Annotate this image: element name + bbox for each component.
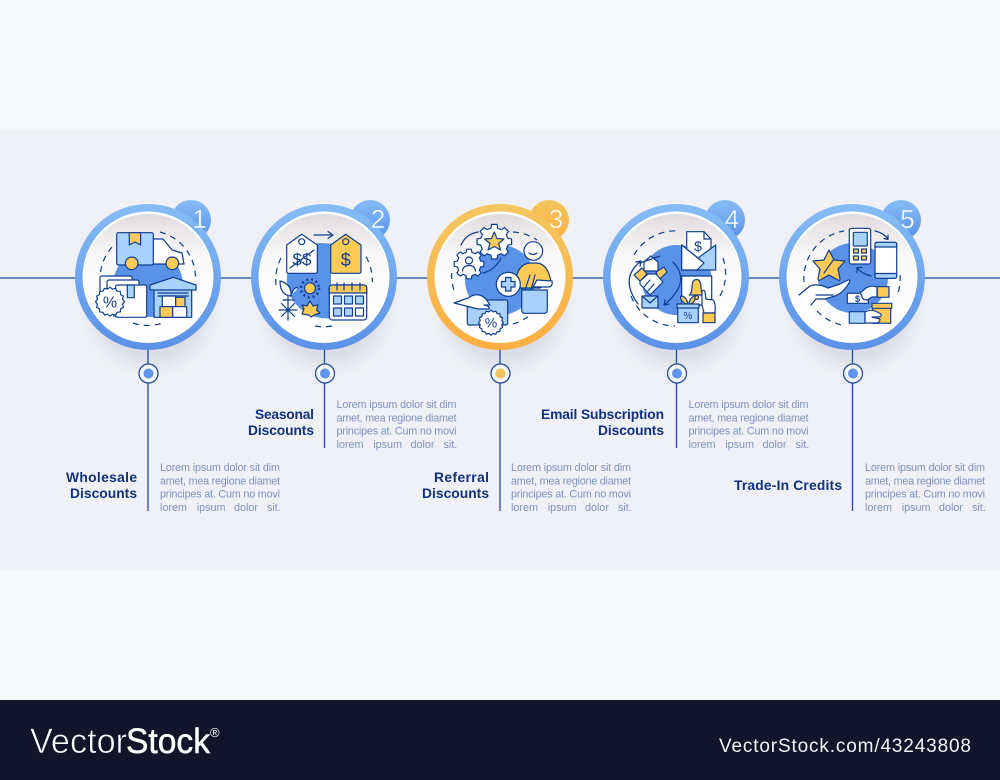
- heading 4: Discounts: [598, 423, 664, 438]
- number badge 2: [251, 200, 397, 350]
- heading 4: Email Subscription: [541, 407, 664, 422]
- panel 1: wholesale discounts: [66, 200, 281, 514]
- body text 2: amet, mea regione diamet: [336, 412, 456, 424]
- icon: truck, parcel and warehouse: %: [103, 294, 117, 312]
- horizontal timeline: [0, 277, 1000, 279]
- footer logo: Stock: [126, 722, 210, 761]
- body text 1: dolor: [234, 502, 258, 514]
- heading 3: Discounts: [422, 486, 489, 501]
- icon: price tags, seasons and calendar: $$: [293, 250, 312, 269]
- icon: email, gift, handshake and bell: $: [694, 238, 702, 254]
- footer bar: [0, 700, 1000, 780]
- heading 4: [541, 407, 664, 438]
- heading 1: Discounts: [70, 486, 137, 501]
- body text 4: Lorem ipsum dolor sit dim: [688, 399, 808, 411]
- icon: star, devices, hands and money: [799, 228, 900, 325]
- timeline marker 4: [668, 364, 686, 383]
- body text 1: amet, mea regione diamet: [160, 475, 280, 487]
- icon: truck, parcel and warehouse: [96, 232, 196, 325]
- heading 2: Discounts: [248, 423, 314, 438]
- body text 2: sit.: [444, 439, 457, 451]
- heading 3: Referral: [434, 470, 489, 485]
- icon: email, gift, handshake and bell: %: [684, 311, 693, 322]
- body text 2: Lorem ipsum dolor sit dim: [336, 399, 456, 411]
- body text 5: dolor: [939, 502, 963, 514]
- body text 5: [865, 462, 986, 514]
- heading 3: [422, 470, 489, 501]
- heading 2: [248, 407, 314, 438]
- body text 1: ipsum: [197, 502, 226, 514]
- number badge 4: 4: [725, 204, 739, 234]
- number badge 5: [779, 200, 925, 350]
- panel 2: seasonal discounts: [248, 200, 457, 451]
- body text 5: lorem: [865, 502, 892, 514]
- panel 5: trade-in credits: [734, 200, 986, 514]
- number badge 4: [603, 200, 749, 350]
- body text 3: sit.: [618, 502, 632, 514]
- body text 5: sit.: [972, 502, 986, 514]
- body text 5: principes at. Cum no movi: [865, 489, 985, 501]
- icon: price tags, seasons and calendar: $: [341, 250, 351, 270]
- footer logo: Vector: [30, 722, 127, 761]
- icon: referral gears, person and shopping bag: [452, 224, 552, 335]
- panel 3: referral discounts: [422, 200, 632, 514]
- timeline marker 5: [844, 364, 862, 383]
- icon: star, devices, hands and money: $: [855, 294, 860, 304]
- heading 1: Wholesale: [66, 470, 137, 485]
- number badge 3: 3: [549, 204, 563, 234]
- icon: referral gears, person and shopping bag: %: [485, 314, 497, 330]
- body text 3: lorem: [511, 502, 538, 514]
- body text 1: [160, 462, 281, 514]
- body text 4: dolor: [762, 439, 787, 451]
- panel 4: email subscription discounts: [541, 200, 809, 451]
- body text 4: sit.: [796, 439, 809, 451]
- body text 4: principes at. Cum no movi: [688, 426, 808, 438]
- timeline marker 2: [316, 364, 334, 383]
- body text 3: principes at. Cum no movi: [511, 489, 631, 501]
- body text 3: Lorem ipsum dolor sit dim: [511, 462, 631, 474]
- body text 1: sit.: [267, 502, 281, 514]
- body text 4: lorem: [688, 439, 716, 451]
- heading 2: Seasonal: [255, 407, 314, 422]
- body text 5: Lorem ipsum dolor sit dim: [865, 462, 985, 474]
- footer logo: ®: [210, 725, 220, 740]
- body text 4: [688, 399, 809, 451]
- body text 2: dolor: [410, 439, 435, 451]
- timeline marker 1: [139, 364, 158, 383]
- number badge 1: 1: [192, 204, 207, 234]
- body text 2: lorem: [336, 439, 364, 451]
- number badge 5: 5: [900, 204, 915, 234]
- body text 3: dolor: [585, 502, 609, 514]
- body text 2: ipsum: [373, 439, 402, 451]
- body text 3: amet, mea regione diamet: [511, 475, 631, 487]
- footer image id: VectorStock.com/43243808: [719, 736, 971, 757]
- footer logo: [30, 722, 220, 761]
- heading 5: Trade-In Credits: [734, 478, 842, 493]
- body text 2: [336, 399, 457, 451]
- timeline marker 3: [491, 364, 510, 383]
- body text 2: principes at. Cum no movi: [336, 426, 456, 438]
- body text 4: amet, mea regione diamet: [688, 412, 808, 424]
- number badge 3: [427, 200, 573, 350]
- body text 3: [511, 462, 632, 514]
- body text 5: amet, mea regione diamet: [865, 475, 985, 487]
- body text 5: ipsum: [902, 502, 931, 514]
- body text 3: ipsum: [548, 502, 577, 514]
- background band: [0, 130, 1000, 570]
- number badge 1: [75, 200, 221, 350]
- body text 1: Lorem ipsum dolor sit dim: [160, 462, 280, 474]
- heading 1: [66, 470, 137, 501]
- body text 4: ipsum: [725, 439, 754, 451]
- body text 1: lorem: [160, 502, 187, 514]
- icon: email, gift, handshake and bell: [629, 231, 726, 326]
- number badge 2: 2: [371, 204, 385, 234]
- icon: price tags, seasons and calendar: [276, 232, 372, 327]
- body text 1: principes at. Cum no movi: [160, 489, 280, 501]
